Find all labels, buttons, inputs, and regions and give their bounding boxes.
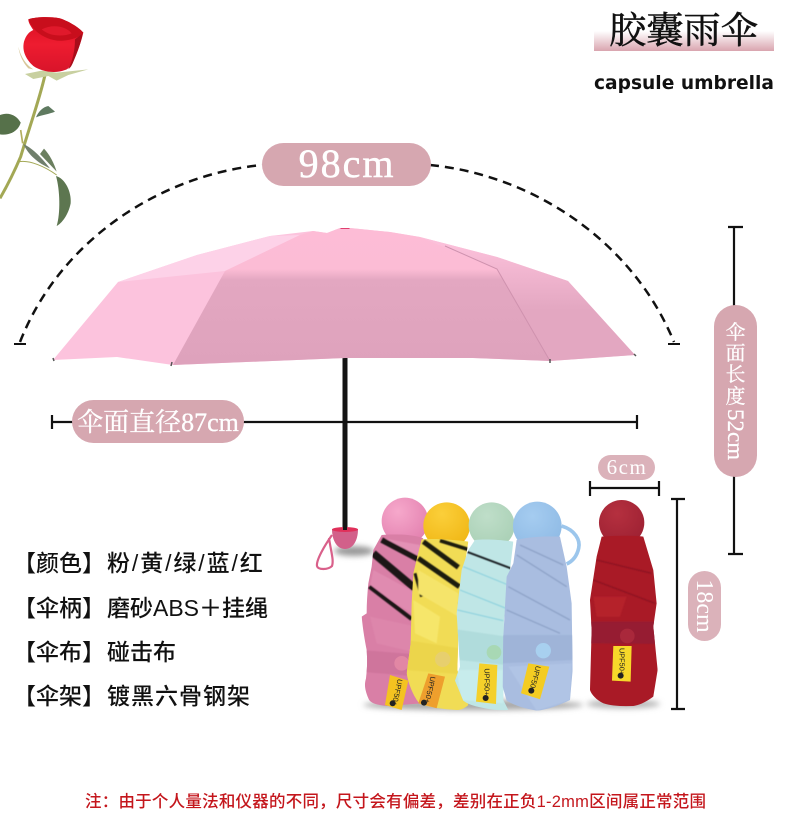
label pill: 98cm: 98cm (299, 141, 395, 186)
capsule umbrella: yellow (406, 502, 470, 710)
label pill: 18cm (688, 571, 721, 641)
capsule umbrella: pink (362, 498, 427, 706)
label pill: 伞面直径87cm: 伞面直径87cm (77, 408, 239, 437)
open pink umbrella (53, 228, 636, 569)
spec: frame: 镀黑六骨钢架 (107, 683, 251, 709)
subtitle: capsule umbrella: capsule umbrella (594, 72, 774, 94)
label pill: 98cm (262, 141, 431, 186)
canopy (53, 228, 636, 366)
UPF50+ tag: mint green: UPF50+ (482, 668, 491, 695)
arc dimension: umbrella 98cm (14, 141, 680, 344)
UPF50+ tag: red (612, 646, 632, 682)
label pill: 伞面长度52cm: 52cm (723, 409, 748, 460)
capsule umbrella: red (588, 500, 660, 710)
label pill: 伞面长度52cm: 长 (726, 363, 746, 386)
UPF50+ tag: red: UPF50+ (617, 648, 626, 675)
label pill: 伞面长度52cm (714, 305, 757, 477)
label pill: 伞面直径87cm (72, 400, 244, 443)
umbrella handle ball and strap (317, 520, 374, 569)
label pill: 伞面长度52cm: 面 (726, 342, 746, 365)
specification list (13, 550, 268, 709)
spec: handle: 磨砂ABS＋挂绳 (107, 595, 268, 621)
spec: fabric: 碰击布 (107, 639, 176, 665)
spec: frame: 【伞架】 (13, 683, 105, 709)
label pill: 6cm: 6cm (607, 455, 647, 479)
capsule umbrella: mint green (453, 502, 517, 713)
UPF50+ tag: mint green (476, 663, 497, 704)
rose blossom (23, 17, 83, 72)
umbrella handle shaft (342, 357, 348, 529)
label pill: 伞面长度52cm: 伞 (726, 321, 746, 344)
capsule umbrella: blue (500, 502, 579, 713)
icon: red rose (0, 17, 88, 226)
dimension: capsule height 18cm (671, 499, 721, 709)
capsule umbrellas group (357, 498, 660, 715)
label pill: 伞面长度52cm: 度 (726, 385, 746, 408)
footnote: 注：由于个人量法和仪器的不同，尺寸会有偏差，差别在正负1-2mm区间属正常范围 (85, 792, 706, 811)
label pill: 18cm: 18cm (691, 579, 717, 633)
spec: colour: 粉/黄/绿/蓝/红 (107, 550, 265, 576)
UPF50+ tag: pink: UPF50+ (390, 678, 405, 707)
dimension: capsule width 6cm (590, 455, 659, 496)
dimension: canopy diameter 87cm (52, 400, 637, 443)
spec: colour: 【颜色】 (13, 550, 105, 576)
spec: fabric: 【伞布】 (13, 639, 105, 665)
UPF50+ tag: yellow: UPF50+ (423, 676, 437, 704)
spec: handle: 【伞柄】 (13, 595, 105, 621)
UPF50+ tag: yellow (418, 673, 445, 708)
title: 胶囊雨伞: 胶囊雨伞 (609, 10, 758, 52)
UPF50+ tag: pink (385, 675, 408, 710)
UPF50+ tag: blue (521, 663, 549, 699)
UPF50+ tag: blue: UPF50+ (527, 665, 543, 693)
dimension: canopy length 52cm (714, 227, 757, 554)
